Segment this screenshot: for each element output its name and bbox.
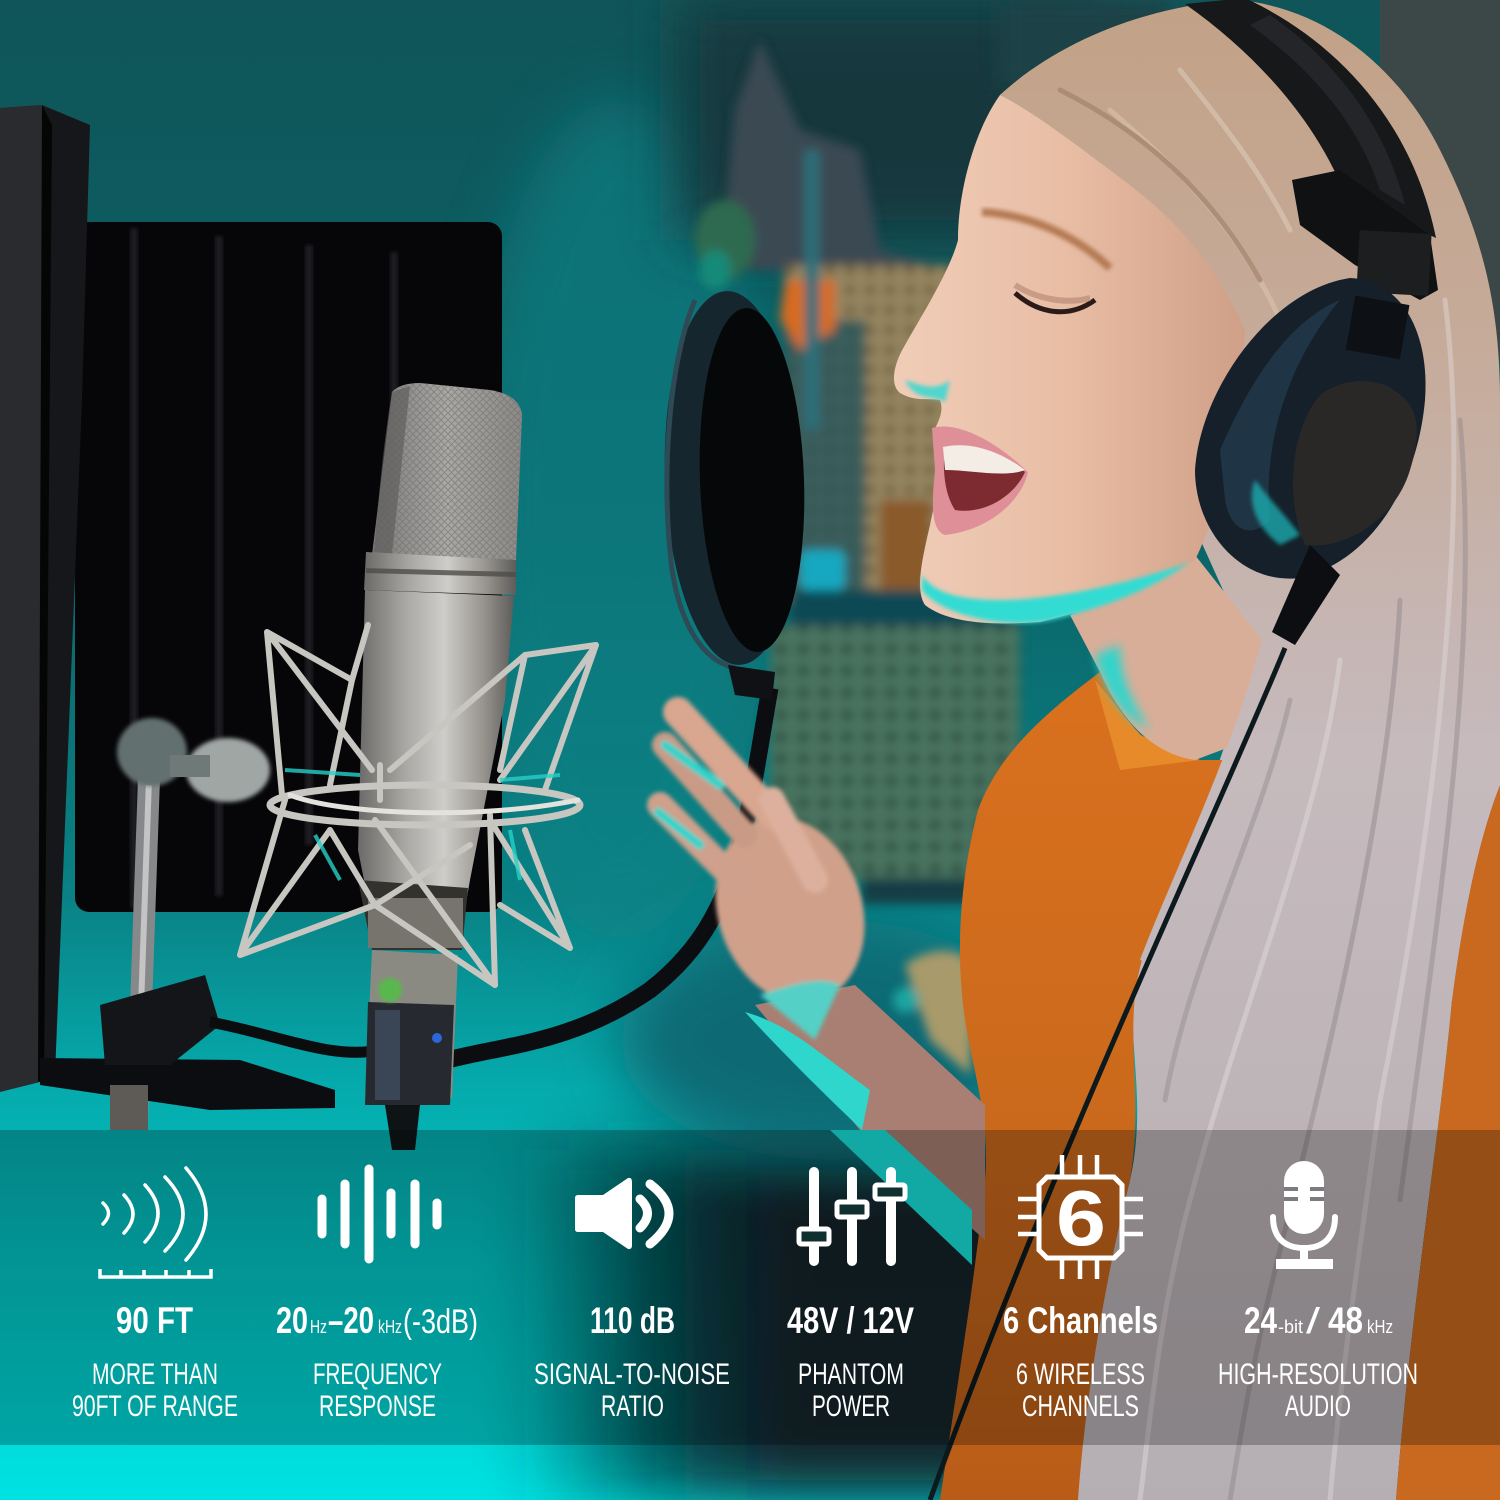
wireless transmitter (365, 950, 458, 1150)
mouth (932, 426, 1028, 535)
forearm (755, 985, 985, 1240)
arm teal streak through band (830, 1130, 972, 1265)
hair streaks (1060, 70, 1465, 1500)
stat: 20 Hz to 20 kHz: kHz (378, 1317, 402, 1337)
neck (1070, 555, 1262, 760)
ear cup (1195, 278, 1426, 579)
stat: 20 Hz to 20 kHz: Hz (310, 1317, 327, 1337)
stat: 6 Channels: 6 Channels (1003, 1300, 1158, 1341)
headphones (1185, 0, 1438, 645)
mic collar (364, 552, 516, 595)
icon: chip with 6: 6 (1056, 1174, 1106, 1262)
shock mount (240, 625, 596, 985)
feature: signal to noise (534, 1178, 730, 1423)
caption: phantom power: PHANTOM (798, 1358, 904, 1391)
acoustic foam shield (75, 222, 502, 912)
caption: frequency response (313, 1358, 442, 1423)
icon: microphone (1273, 1161, 1335, 1269)
stat: 24-bit / 48 kHz: 48 (1328, 1300, 1363, 1341)
feature: phantom power (787, 1172, 914, 1423)
microphone (358, 383, 522, 1150)
icon: speaker (575, 1178, 669, 1249)
caption: signal-to-noise ratio: RATIO (601, 1390, 664, 1423)
hand (658, 712, 888, 1040)
stat: 24-bit / 48 kHz: 24 (1244, 1300, 1277, 1341)
feature: range (72, 1168, 238, 1423)
icon: chip with 6 (1018, 1155, 1143, 1279)
gooseneck lower cable (210, 1022, 380, 1052)
stat: 110 dB: 110 dB (590, 1300, 675, 1341)
caption: 6 wireless channels (1016, 1358, 1145, 1423)
feature: channels (1003, 1155, 1158, 1423)
caption: 6 wireless channels: CHANNELS (1022, 1390, 1139, 1423)
stat: 24-bit / 48 kHz: kHz (1367, 1317, 1393, 1337)
stat: 48V / 12V: 48V / 12V (787, 1300, 914, 1341)
caption: phantom power: POWER (812, 1390, 890, 1423)
caption: high-resolution audio (1218, 1358, 1418, 1423)
chin teal light (922, 562, 1190, 623)
caption: signal-to-noise ratio (534, 1358, 730, 1423)
mic body (358, 590, 514, 925)
hand and forearm (658, 712, 985, 1240)
caption: signal-to-noise ratio: SIGNAL-TO-NOISE (534, 1358, 730, 1391)
stat: 20 Hz to 20 kHz: –20 (328, 1300, 374, 1341)
feature: high-resolution audio (1218, 1161, 1418, 1423)
icon: mixer sliders (799, 1172, 905, 1261)
headband (1185, 0, 1436, 238)
caption: high-resolution audio: AUDIO (1285, 1390, 1351, 1423)
mic head grille (372, 383, 522, 560)
pop filter (659, 289, 810, 700)
caption: frequency response: FREQUENCY (313, 1358, 442, 1391)
caption: phantom power (798, 1358, 904, 1423)
reflection filter side panel (0, 105, 90, 1092)
stat: 20 Hz to 20 kHz (276, 1300, 478, 1341)
eyebrow (982, 212, 1110, 268)
orange shirt (940, 672, 1500, 1500)
icon: waveform (322, 1169, 437, 1259)
caption: more than 90ft of range: 90FT OF RANGE (72, 1390, 238, 1423)
stat: 20 Hz to 20 kHz: 20 (276, 1300, 308, 1341)
feature band overlay (0, 1130, 1500, 1445)
hair: front strands over shoulder (1000, 0, 1500, 1500)
desk stand and clamp (40, 718, 335, 1130)
forearm teal light (745, 1012, 870, 1130)
stat: 90 FT: 90 FT (116, 1300, 193, 1341)
shirt right sleeve (1396, 785, 1500, 1500)
headband slider (1292, 170, 1438, 300)
caption: more than 90ft of range: MORE THAN (92, 1358, 218, 1391)
closed eye (1015, 285, 1095, 312)
stat: 24-bit / 48 kHz (1244, 1300, 1393, 1341)
gooseneck arm (440, 688, 770, 1062)
stat: 24-bit / 48 kHz: / (1306, 1300, 1320, 1341)
caption: high-resolution audio: HIGH-RESOLUTION (1218, 1358, 1418, 1391)
face (894, 95, 1245, 623)
blurred background: pegboards and guitars (695, 40, 1020, 1075)
teal glints on shock mount (285, 770, 560, 880)
caption: frequency response: RESPONSE (319, 1390, 436, 1423)
neck teal glow (1095, 645, 1150, 730)
stat: 24-bit / 48 kHz: -bit (1278, 1317, 1303, 1337)
stat: 20 Hz to 20 kHz: (-3dB) (403, 1303, 478, 1341)
nose teal light (905, 380, 950, 402)
icon: sound waves over ruler (100, 1168, 211, 1277)
caption: 6 wireless channels: 6 WIRELESS (1016, 1358, 1145, 1391)
feature: frequency response (276, 1169, 478, 1423)
headphone cable (930, 648, 1285, 1500)
hair: main mass (1000, 0, 1500, 1500)
caption: more than 90ft of range (72, 1358, 238, 1423)
cup stem (1272, 545, 1340, 645)
